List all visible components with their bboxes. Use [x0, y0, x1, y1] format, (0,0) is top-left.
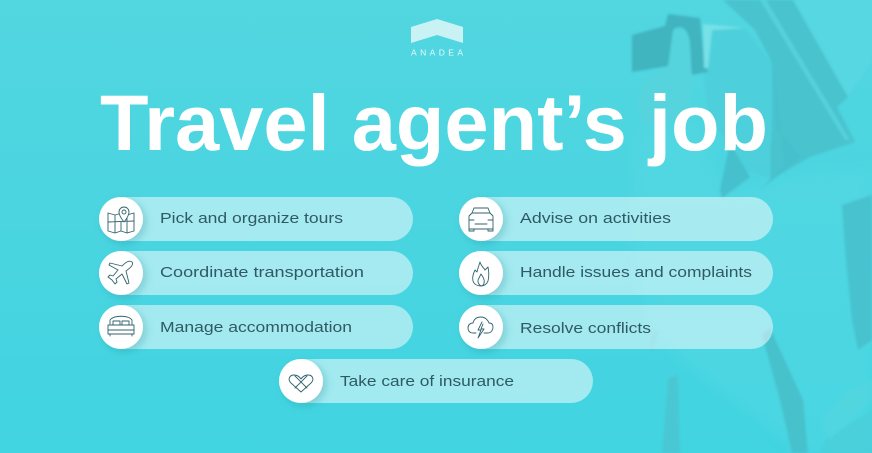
icon: airplane: [108, 261, 133, 284]
icon: map with pin: [108, 207, 134, 233]
item: Advise on activities: [459, 197, 773, 241]
item: Manage accommodation: Manage accommodation: [160, 319, 352, 336]
logo mark: [411, 19, 463, 43]
icon: heart pill: [289, 375, 313, 392]
item: Take care of insurance: [279, 359, 593, 403]
item: Manage accommodation: [99, 305, 413, 349]
item: Coordinate transportation: [99, 251, 413, 295]
item: Handle issues and complaints: [459, 251, 773, 295]
item: Pick and organize tours: Pick and organize tours: [160, 210, 343, 227]
item: Resolve conflicts: Resolve conflicts: [520, 320, 651, 337]
logo wordmark: ANADEA: [411, 48, 463, 58]
item: Pick and organize tours: [99, 197, 413, 241]
icon: storm cloud: [468, 317, 493, 338]
logo: Anadea: [411, 19, 463, 58]
icon: flame: [473, 262, 489, 286]
background photo: woman with camera: [632, 0, 872, 453]
title: Travel agent’s job: [100, 78, 768, 167]
icon: car: [469, 208, 493, 231]
icon: bed: [108, 316, 134, 336]
item: Resolve conflicts: [459, 305, 773, 349]
item: Coordinate transportation: Coordinate transportation: [160, 264, 364, 281]
item: Handle issues and complaints: Handle issues and complaints: [520, 264, 752, 281]
item: Take care of insurance: Take care of insurance: [340, 373, 514, 390]
item: Advise on activities: Advise on activities: [520, 210, 671, 227]
